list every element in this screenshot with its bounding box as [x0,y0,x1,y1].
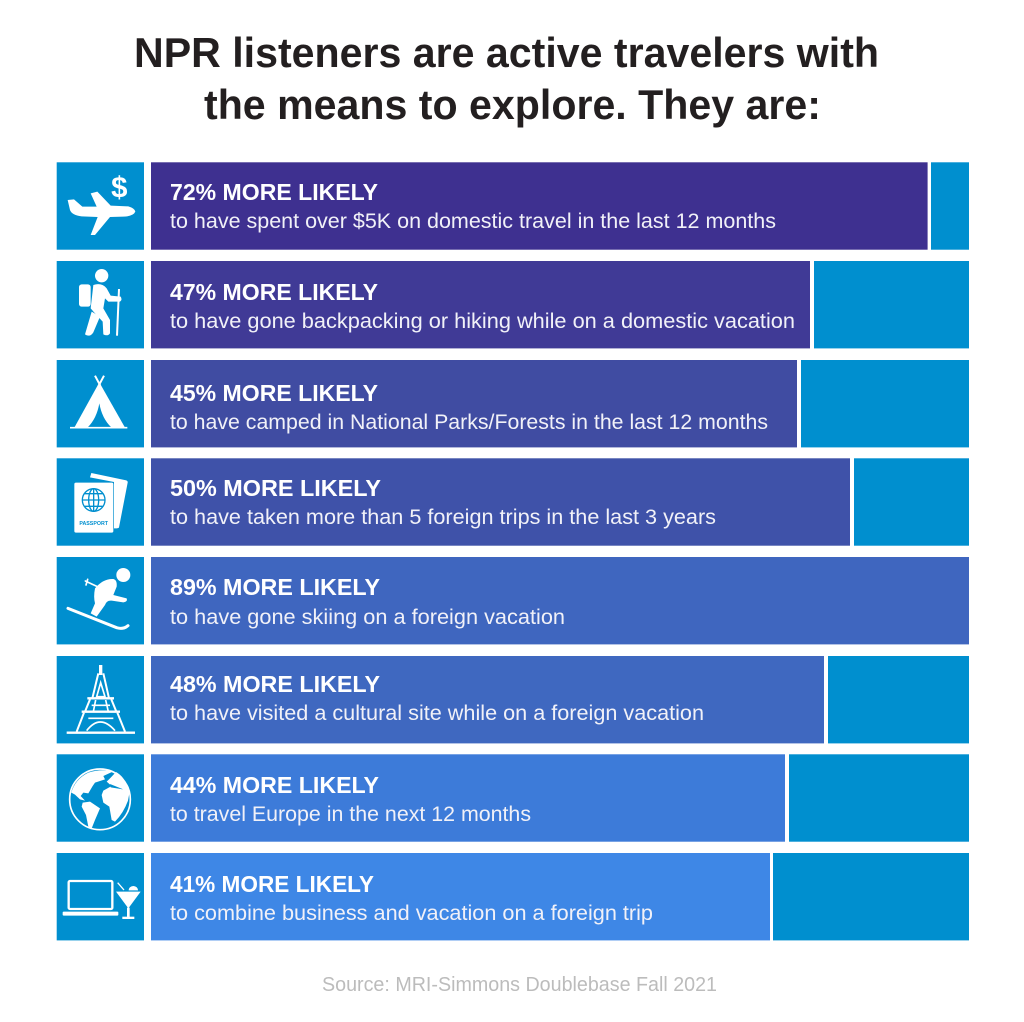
title [134,29,879,128]
remainder bar [931,162,969,250]
text: 72% more likely [170,179,776,233]
icon: laptop and martini [57,853,144,940]
text: 89% more likely [170,574,565,629]
icon: hiker [57,261,144,348]
row 5: skiing [57,557,969,644]
bar: 48% [151,656,824,743]
icon: skier [57,557,144,644]
row 3: camping [57,360,969,447]
remainder bar [773,853,969,940]
icon: passports [57,458,144,546]
icon: airplane with dollar sign [57,162,144,250]
remainder bar [828,656,969,743]
text: 44% more likely [170,772,531,826]
text: 41% more likely: 41% MORE LIKELY [170,871,374,897]
text: 50% more likely [170,475,716,529]
row 8: business and vacation [57,853,969,940]
title: the means to explore. They are: [204,81,821,128]
text: 41% more likely [170,871,653,925]
row 1: domestic travel spending [57,162,969,250]
bar: 89% [151,557,969,644]
text: 48% more likely: 48% MORE LIKELY [170,671,380,697]
text: 45% more likely: 45% MORE LIKELY [170,380,378,406]
bar: 44% [151,754,785,842]
text: 48% more likely [170,671,704,725]
row 4: foreign trips [57,458,969,546]
text: 89% more likely: to have gone skiing on a foreign vacation [170,605,565,629]
icon: globe [57,754,144,842]
icon: passports: PASSPORT [79,521,109,527]
icon: tent [57,360,144,447]
text: 72% more likely: 72% MORE LIKELY [170,179,378,205]
bar: 47% [151,261,810,348]
row 6: cultural site [57,656,969,743]
text: 45% more likely [170,380,768,434]
text: 50% more likely: to have taken more than 5 foreign trips in the last 3 years [170,505,716,529]
icon: airplane with dollar sign: $ [111,171,127,204]
row 7: travel Europe [57,754,969,842]
text: 44% more likely: to travel Europe in the next 12 months [170,802,531,826]
text: 48% more likely: to have visited a cultural site while on a foreign vacation [170,701,704,725]
bar: 41% [151,853,770,940]
row 2: backpacking or hiking [57,261,969,348]
source note: Source: MRI-Simmons Doublebase Fall 2021 [322,974,717,996]
text: 47% more likely: to have gone backpacking or hiking while on a domestic vacation [170,309,795,333]
text: 89% more likely: 89% MORE LIKELY [170,574,380,600]
remainder bar [814,261,969,348]
text: 44% more likely: 44% MORE LIKELY [170,772,379,798]
icon: Eiffel tower [57,656,144,743]
text: 47% more likely [170,279,795,333]
remainder bar [854,458,969,546]
text: 72% more likely: to have spent over $5K on domestic travel in the last 12 months [170,209,776,233]
text: 50% more likely: 50% MORE LIKELY [170,475,381,501]
text: 47% more likely: 47% MORE LIKELY [170,279,378,305]
remainder bar [789,754,969,842]
text: 41% more likely: to combine business and vacation on a foreign trip [170,901,653,925]
bar: 45% [151,360,797,447]
bar: 50% [151,458,850,546]
title: NPR listeners are active travelers with [134,29,879,76]
remainder bar [801,360,969,447]
text: 45% more likely: to have camped in National Parks/Forests in the last 12 months [170,410,768,434]
bar: 72% [151,162,928,250]
